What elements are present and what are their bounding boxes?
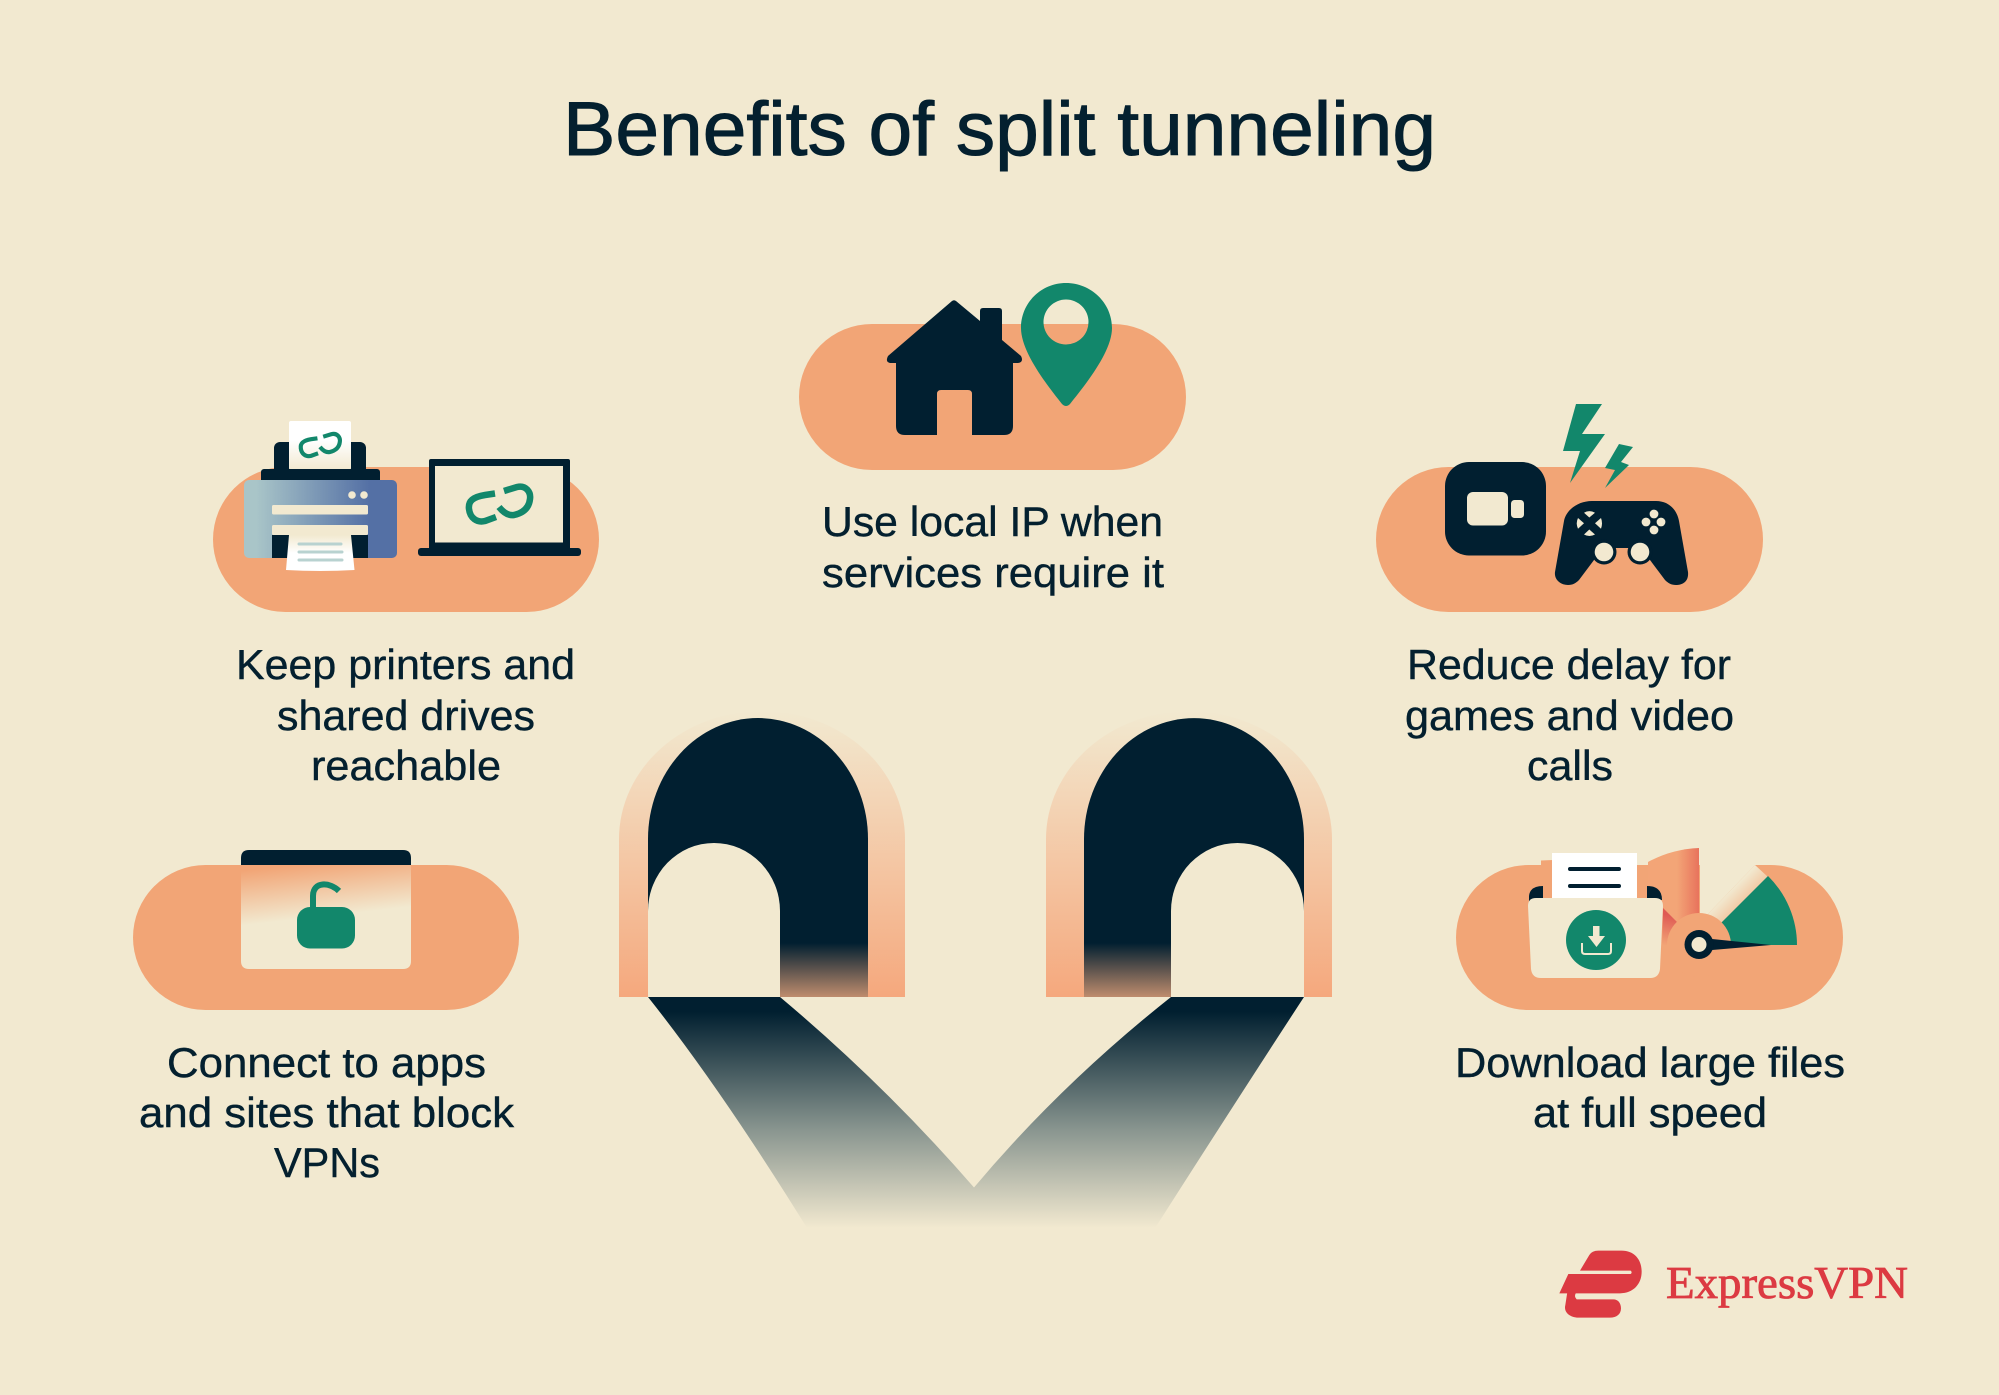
caption: shared drives <box>277 692 535 739</box>
caption: Reduce delay for <box>1407 641 1731 688</box>
caption: and sites that block <box>139 1089 515 1136</box>
pill background <box>133 865 519 1010</box>
icon: game controller <box>1555 501 1688 585</box>
caption <box>1405 641 1734 789</box>
panel: reduce delay <box>1376 404 1763 789</box>
right tunnel <box>1046 711 1332 997</box>
caption: games and video <box>1405 692 1734 739</box>
left road <box>648 997 974 1236</box>
caption <box>139 1039 515 1186</box>
icon: house <box>887 300 1022 435</box>
caption: Keep printers and <box>236 641 575 688</box>
icon: printer <box>244 421 397 571</box>
logo mark <box>1559 1251 1642 1318</box>
illustration: split tunnels <box>619 711 1332 1236</box>
panel: connect to apps <box>133 850 519 1186</box>
pill background <box>1456 865 1843 1010</box>
right road <box>974 997 1304 1236</box>
left tunnel <box>619 711 905 997</box>
panel: keep printers reachable <box>213 421 599 789</box>
pill background <box>213 467 599 612</box>
icon: location pin <box>1021 283 1112 406</box>
title: Benefits of split tunneling <box>563 87 1436 172</box>
icon: folder with download <box>1528 853 1663 978</box>
caption: Use local IP when <box>822 498 1163 545</box>
caption: Connect to apps <box>167 1039 486 1086</box>
caption: Download large files <box>1455 1039 1845 1086</box>
icon: video call <box>1445 462 1546 556</box>
icon: browser window with open lock <box>241 850 411 969</box>
caption <box>236 641 575 789</box>
icon: lightning bolts <box>1563 404 1633 488</box>
caption: reachable <box>311 742 501 789</box>
logo: ExpressVPN <box>1559 1251 1908 1318</box>
icon: speedometer <box>1648 848 1797 977</box>
caption <box>822 498 1164 596</box>
caption <box>1455 1039 1845 1136</box>
panel: download large files <box>1455 848 1845 1136</box>
caption: services require it <box>822 549 1164 596</box>
panel: use local IP <box>799 283 1186 596</box>
caption: at full speed <box>1533 1089 1767 1136</box>
caption: VPNs <box>274 1139 380 1186</box>
logo wordmark: ExpressVPN <box>1666 1258 1908 1308</box>
icon: laptop <box>418 459 581 556</box>
caption: calls <box>1527 742 1613 789</box>
pill background <box>1376 467 1763 612</box>
pill background <box>799 324 1186 470</box>
